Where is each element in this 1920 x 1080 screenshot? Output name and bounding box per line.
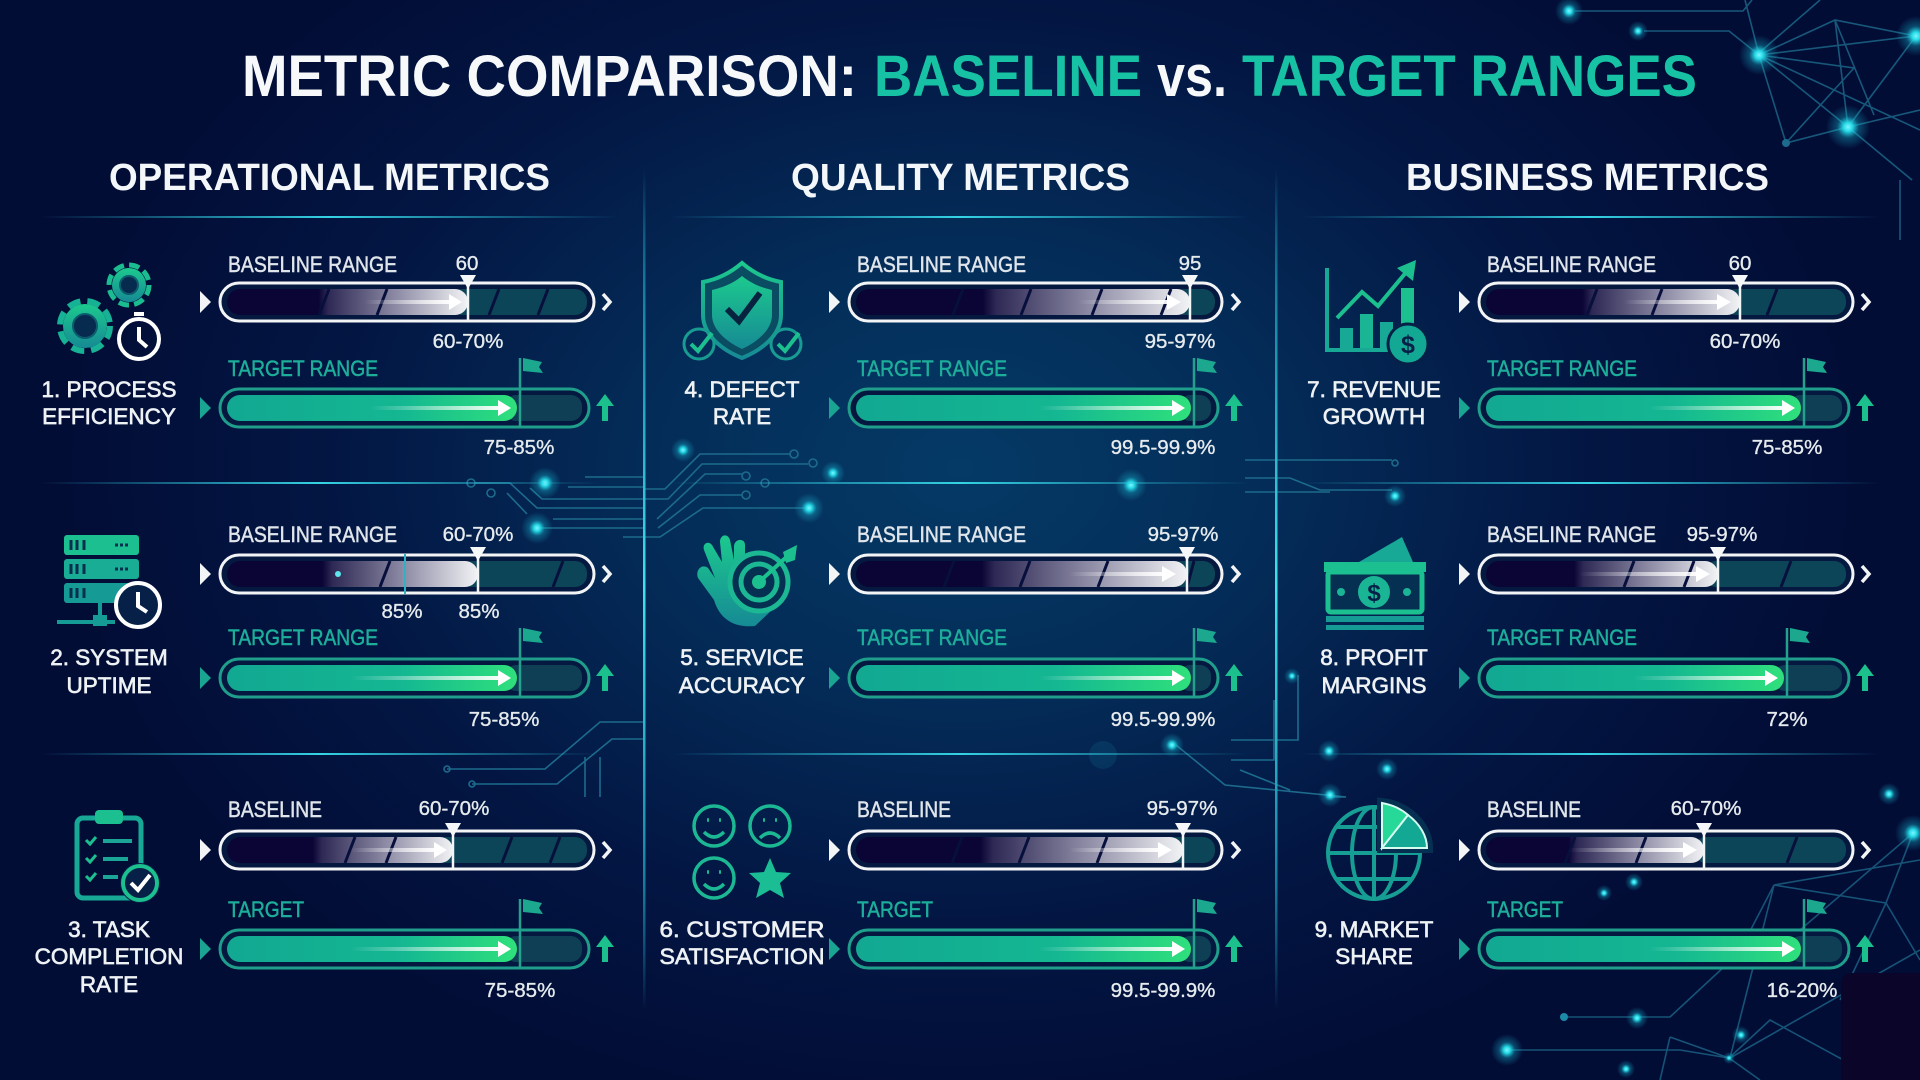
label: 7. REVENUE (1307, 377, 1441, 402)
icon: clipboard (77, 810, 160, 903)
label (660, 917, 824, 969)
label: UPTIME (66, 673, 152, 698)
target bar (829, 625, 1243, 731)
target bar: 75-85% (469, 708, 539, 731)
network decoration top right (1555, 0, 1920, 240)
target bar (1459, 625, 1874, 731)
icon: globe and pie (1328, 803, 1428, 899)
baseline bar: 60 (1729, 252, 1751, 275)
icon: growth chart and dollar (1327, 260, 1428, 364)
baseline bar: 95-97% (1145, 330, 1215, 353)
metric 5: service accuracy (679, 522, 1243, 731)
baseline bar: 60-70% (1671, 797, 1741, 820)
baseline bar: 60 (456, 252, 478, 275)
target bar (829, 356, 1243, 459)
label: SHARE (1335, 944, 1413, 969)
metric 9: market share (1315, 797, 1874, 969)
title: TARGET RANGES (1242, 44, 1697, 109)
baseline bar: 95 (1179, 252, 1201, 275)
network decoration bottom right (1318, 783, 1920, 1080)
target bar (1459, 356, 1874, 459)
label (679, 645, 805, 698)
icon: growth chart and dollar: $ (1401, 331, 1415, 359)
title: vs. (1157, 44, 1227, 109)
target bar: 72% (1766, 708, 1808, 731)
label: 3. TASK (68, 917, 150, 942)
baseline bar: 85% (458, 600, 500, 623)
label: EFFICIENCY (42, 404, 176, 429)
label: 5. SERVICE (680, 645, 804, 670)
heading: operational metrics: OPERATIONAL METRICS (109, 157, 550, 199)
title (242, 44, 1697, 109)
baseline bar: BASELINE RANGE (228, 252, 397, 277)
label: 2. SYSTEM (50, 645, 168, 670)
label: 8. PROFIT (1320, 645, 1428, 670)
baseline bar (1459, 797, 1869, 869)
label (1320, 645, 1428, 698)
label: 4. DEFECT (684, 377, 800, 402)
baseline bar: 60-70% (433, 330, 503, 353)
heading: quality metrics: QUALITY METRICS (791, 157, 1130, 199)
baseline bar (829, 252, 1239, 353)
baseline bar (200, 522, 610, 623)
label: 6. CUSTOMER (660, 917, 824, 942)
metric 1: process efficiency (41, 252, 614, 459)
label: SATISFACTION (660, 944, 824, 969)
icon: money stack (1324, 537, 1426, 630)
baseline bar: BASELINE (1487, 797, 1581, 822)
baseline bar (1459, 252, 1869, 353)
baseline bar: BASELINE RANGE (857, 252, 1026, 277)
target bar: TARGET RANGE (228, 356, 378, 381)
target bar (1459, 897, 1874, 968)
baseline bar: BASELINE RANGE (1487, 522, 1656, 547)
dividers (40, 170, 1880, 1010)
baseline bar (200, 797, 610, 869)
icon: money stack: $ (1367, 580, 1381, 607)
label: COMPLETION (35, 944, 183, 969)
metric 4: defect rate (684, 252, 1243, 459)
target bar (200, 625, 614, 731)
metric 2: system uptime (50, 522, 614, 731)
label (50, 645, 168, 698)
icon: smileys and star (694, 806, 791, 898)
title: BASELINE (874, 44, 1142, 109)
target bar: 75-85% (1752, 436, 1822, 459)
panel: operational metrics (35, 157, 614, 1002)
icon: hand and target (697, 535, 797, 626)
heading: business metrics: BUSINESS METRICS (1406, 157, 1769, 199)
target bar: TARGET RANGE (1487, 356, 1637, 381)
baseline bar: 95-97% (1687, 523, 1757, 546)
baseline bar: BASELINE (857, 797, 951, 822)
baseline bar: BASELINE RANGE (857, 522, 1026, 547)
baseline bar: BASELINE RANGE (1487, 252, 1656, 277)
metric 8: profit margins (1320, 522, 1874, 731)
circuit decoration (444, 438, 1406, 797)
baseline bar (200, 252, 610, 353)
target bar: TARGET (228, 897, 304, 922)
label (35, 917, 183, 997)
panel: business metrics (1307, 157, 1874, 969)
metric 3: task completion rate (35, 797, 614, 1002)
baseline bar (829, 797, 1239, 869)
label: MARGINS (1321, 673, 1427, 698)
icon: server and clock (57, 535, 162, 629)
baseline bar: 95-97% (1147, 797, 1217, 820)
baseline bar: 60-70% (1710, 330, 1780, 353)
baseline bar: 60-70% (443, 523, 513, 546)
label (1315, 917, 1434, 969)
panel: quality metrics (660, 157, 1243, 1002)
target bar (200, 356, 614, 459)
baseline bar (829, 522, 1239, 593)
baseline bar: BASELINE RANGE (228, 522, 397, 547)
baseline bar: BASELINE (228, 797, 322, 822)
target bar: TARGET (1487, 897, 1563, 922)
target bar: TARGET RANGE (1487, 625, 1637, 650)
label: 1. PROCESS (41, 377, 177, 402)
target bar: 75-85% (485, 979, 555, 1002)
target bar: 99.5-99.9% (1111, 708, 1215, 731)
target bar: 99.5-99.9% (1111, 979, 1215, 1002)
baseline bar: 85% (381, 600, 423, 623)
label: 9. MARKET (1315, 917, 1434, 942)
metric 6: customer satisfaction (660, 797, 1243, 1002)
icon: shield with checks (684, 263, 801, 359)
label (684, 377, 800, 429)
target bar: 99.5-99.9% (1111, 436, 1215, 459)
label (1307, 377, 1441, 429)
label: RATE (713, 404, 771, 429)
dark corner patch (1841, 973, 1920, 1080)
label: ACCURACY (679, 673, 805, 698)
title: METRIC COMPARISON: (242, 44, 857, 109)
target bar: TARGET RANGE (857, 356, 1007, 381)
baseline bar: 95-97% (1148, 523, 1218, 546)
icon: gears and stopwatch (60, 265, 159, 359)
target bar: TARGET (857, 897, 933, 922)
label: RATE (80, 972, 138, 997)
target bar (829, 897, 1243, 1002)
target bar: TARGET RANGE (857, 625, 1007, 650)
label: GROWTH (1323, 404, 1425, 429)
baseline bar: 60-70% (419, 797, 489, 820)
target bar (200, 897, 614, 1002)
target bar: TARGET RANGE (228, 625, 378, 650)
value: 16-20%: 16-20% (1767, 979, 1837, 1002)
label (41, 377, 177, 429)
target bar: 75-85% (484, 436, 554, 459)
metric 7: revenue growth (1307, 252, 1874, 459)
baseline bar (1459, 522, 1869, 593)
